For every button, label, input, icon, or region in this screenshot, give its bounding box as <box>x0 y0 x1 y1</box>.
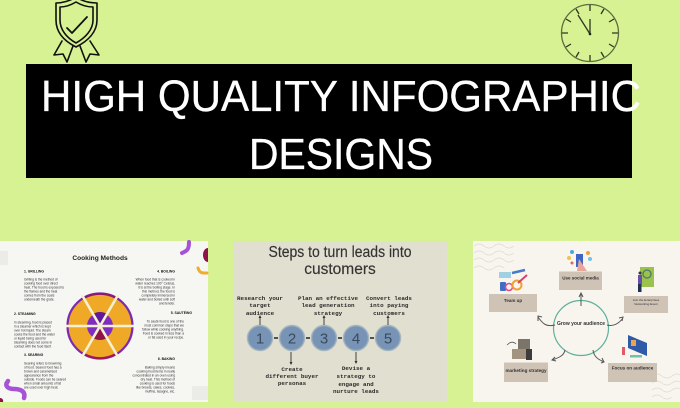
icon: person with board <box>638 267 654 292</box>
left column methods: appearance from the <box>24 374 54 378</box>
step labels: Convert leads <box>366 295 412 302</box>
node labels: Join the Enterprises <box>633 298 660 302</box>
left column methods: steaming does not come in <box>14 340 52 344</box>
icon: wall clock <box>562 4 618 62</box>
step labels: audience <box>246 310 275 317</box>
right column methods: water and boiled until soft <box>139 298 175 302</box>
left column methods: when small amounts of fat <box>24 382 61 386</box>
node boxes <box>489 272 668 382</box>
left column methods: or liquid being used for <box>14 336 47 340</box>
step labels: Create <box>281 366 303 373</box>
right column methods: follow while cooking anything. <box>142 328 184 332</box>
right column methods: cooking is used for foods <box>140 382 175 386</box>
node labels: Networking Event <box>634 302 658 306</box>
step labels: nurture leads <box>333 388 379 395</box>
left column methods: underneath the grate. <box>24 298 55 302</box>
left column methods: In steaming, food is placed <box>14 320 52 324</box>
left column methods: in a steamer which is kept <box>14 324 51 328</box>
left column methods: outside. Foods can be seared <box>24 378 66 382</box>
step labels: into paying <box>370 302 409 309</box>
right column methods: and tender. <box>159 302 175 306</box>
left column methods: cooks the food and the water <box>14 332 56 336</box>
step labels: personas <box>278 380 307 387</box>
right column methods: When food that is cooked in <box>136 278 175 282</box>
step numbers: 4 <box>352 330 360 348</box>
left column methods: are used over high heat. <box>24 386 58 390</box>
left column methods <box>14 270 66 390</box>
right column methods: Baking simply means <box>145 366 175 370</box>
left column methods: cooking food over direct <box>24 282 58 286</box>
central circle <box>554 300 608 356</box>
decorative wavy lines <box>474 244 680 399</box>
right column methods: Food is cooked in less than a <box>143 332 184 336</box>
right column methods: 5. SAUTÉING <box>171 310 192 315</box>
step labels: Research your <box>237 295 283 302</box>
node labels <box>504 276 660 373</box>
node labels: marketing strategy <box>505 368 547 373</box>
right column methods <box>132 270 192 394</box>
right column methods: dry heat. This method of <box>141 378 175 382</box>
right column methods: cooking food items in really <box>137 370 175 374</box>
step numbers: 5 <box>384 330 392 348</box>
node labels: Team up <box>504 298 522 303</box>
decorative purple and gold squiggles <box>0 242 208 402</box>
node labels: Use social media <box>562 276 599 280</box>
step labels: strategy to <box>337 373 376 380</box>
right column methods: or fat used in your recipe. <box>148 336 184 340</box>
panel heading: Steps to turn leads into <box>268 244 412 261</box>
panel: grow your audience <box>473 241 680 402</box>
icon: team up gears <box>499 270 527 291</box>
left column methods: the flames and the heat <box>24 290 57 294</box>
left column methods: 1. GRILLING <box>24 270 44 274</box>
icon: phone with social bubbles <box>567 250 592 271</box>
left column methods: 3. SEARING <box>24 353 44 357</box>
right column methods: 4. BOILING <box>157 270 175 274</box>
wheel chart <box>66 293 134 359</box>
icon: screen with audience <box>622 335 647 358</box>
title text: HIGH QUALITY INFOGRAPHIC <box>41 73 641 121</box>
step labels: lead generation <box>301 302 355 309</box>
step labels <box>237 295 412 395</box>
panel: cooking methods <box>0 241 208 402</box>
right column methods: most common steps that we <box>144 324 184 328</box>
step labels: strategy <box>314 310 343 317</box>
icon: shield badge with check <box>54 0 99 62</box>
right column methods: water reaches 100° Celsius, <box>135 282 175 286</box>
right column methods: it is at the boiling stage. In <box>138 286 175 290</box>
left column methods: over hot liquid. The steam <box>14 328 51 332</box>
step circles with numbers <box>248 326 400 350</box>
right column methods: concentrated in an oven using <box>132 374 175 378</box>
step connectors <box>274 337 374 339</box>
step labels: target <box>249 302 271 309</box>
step labels: different buyer <box>265 373 319 380</box>
right column methods: 6. BAKING <box>158 357 175 361</box>
icon: marketing machine <box>507 339 532 360</box>
right column methods: muffins, lasagne, etc. <box>145 390 175 394</box>
left column methods: Searing refers to browning <box>24 362 62 366</box>
step numbers: 3 <box>320 330 328 348</box>
left column methods: comes from the coals <box>24 294 55 298</box>
left column methods: contact with the food itself. <box>14 344 52 348</box>
step labels: customers <box>373 310 405 317</box>
title banner <box>26 64 641 178</box>
arrows <box>258 315 390 365</box>
panel heading: Cooking Methods <box>72 255 128 262</box>
step numbers <box>256 330 392 348</box>
grid decorations <box>0 251 208 400</box>
right column methods: like breads, cakes, cookies, <box>136 386 175 390</box>
step labels: Plan an effective <box>298 295 359 302</box>
right column methods: completely immersed in <box>142 294 175 298</box>
step numbers: 2 <box>288 330 296 348</box>
central label: Grow your audience <box>557 321 605 327</box>
left column methods: Grilling is the method of <box>24 278 58 282</box>
step numbers: 1 <box>256 330 264 348</box>
curved arrows <box>538 293 623 363</box>
step labels: Devise a <box>342 365 371 372</box>
panel: steps to turn leads into customers: customers <box>304 261 376 278</box>
node labels: Focus on audience <box>612 366 654 370</box>
title text second line: DESIGNS <box>249 131 433 179</box>
right column methods: To sauté food is one of the <box>147 320 184 324</box>
left column methods: 2. STEAMING <box>14 312 36 316</box>
left column methods: of food. Seared food has a <box>24 366 62 370</box>
left column methods: brown and caramelized <box>24 370 57 374</box>
left column methods: heat. The food is exposed to <box>24 286 64 290</box>
step labels: engage and <box>338 381 374 388</box>
right column methods: this method, the food is <box>142 290 175 294</box>
panel: steps to turn leads into customers <box>233 241 447 401</box>
